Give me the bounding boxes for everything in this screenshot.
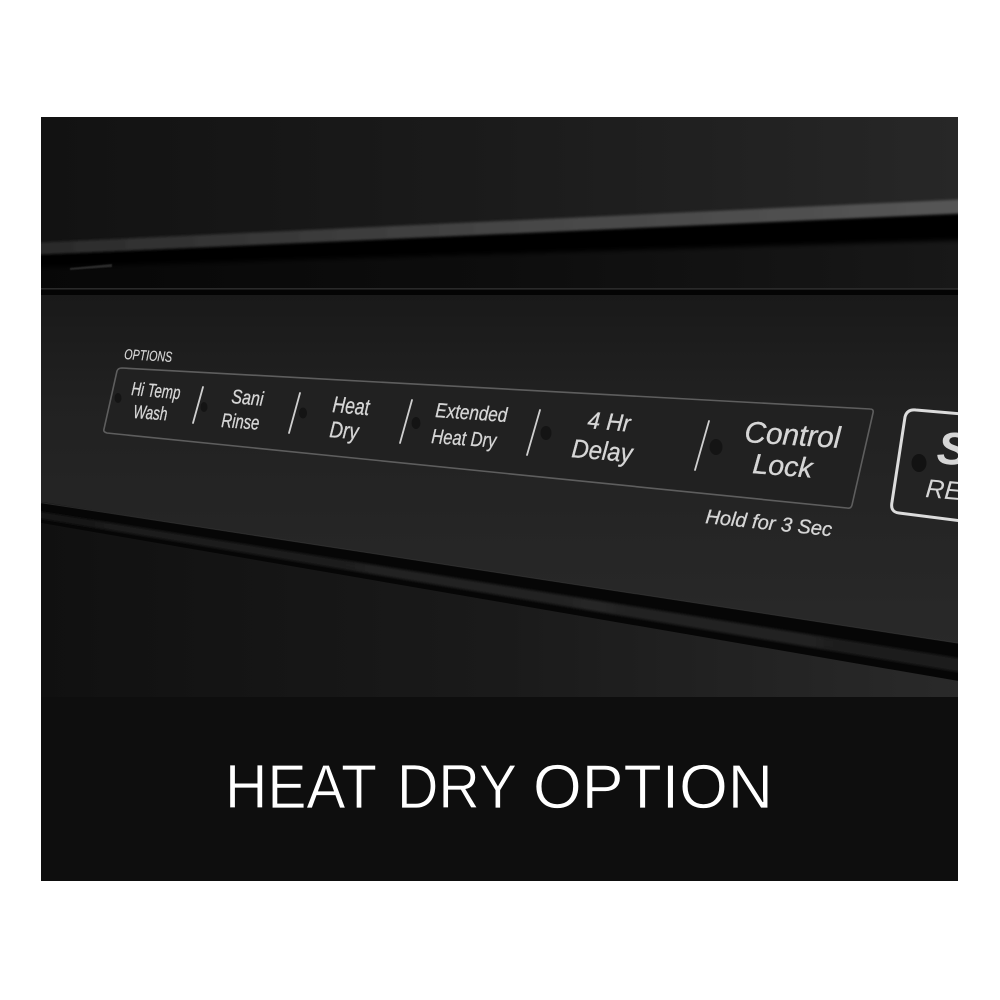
option: extended heat dry: Heat Dry [431, 425, 498, 453]
option: hi temp wash: Wash [133, 402, 168, 425]
dividers [193, 387, 709, 470]
option: sani rinse: Rinse [221, 410, 260, 435]
infographic: dishwasher control panel photo with caption [41, 117, 958, 881]
panel: photo background [30, 117, 970, 700]
option: extended heat dry: Extended [435, 399, 509, 427]
start button [890, 408, 958, 522]
option: heat dry: Dry [329, 416, 361, 445]
start button: RE [924, 473, 964, 506]
option: control lock [744, 416, 843, 484]
caption title [225, 753, 773, 822]
option: sani rinse [221, 386, 265, 435]
caption title: DRY [397, 753, 517, 822]
options button strip [104, 368, 873, 508]
start button: S [935, 421, 971, 476]
option: hi temp wash [131, 379, 181, 425]
option: heat dry: Heat [332, 391, 372, 420]
option: hi temp wash: Hi Temp [131, 379, 181, 404]
label: options: OPTIONS [124, 347, 173, 366]
lower trim strip [30, 501, 970, 683]
option: heat dry [329, 391, 372, 445]
caption title: OPTION [533, 753, 773, 822]
note: hold for 3 sec: Hold for 3 Sec [704, 506, 833, 541]
option: control lock: Lock [752, 448, 816, 484]
option: control lock: Control [744, 416, 843, 455]
caption title: HEAT [225, 753, 377, 822]
option: 4 hr delay: Delay [570, 433, 636, 468]
lower door [30, 520, 970, 700]
option: 4 hr delay [570, 407, 636, 468]
control panel face [41, 295, 958, 596]
option: extended heat dry [431, 399, 509, 453]
caption band [41, 697, 958, 881]
option: sani rinse: Sani [231, 386, 265, 411]
upper door rail [30, 199, 970, 296]
indicator lights [114, 393, 722, 455]
option: 4 hr delay: 4 Hr [586, 407, 633, 438]
